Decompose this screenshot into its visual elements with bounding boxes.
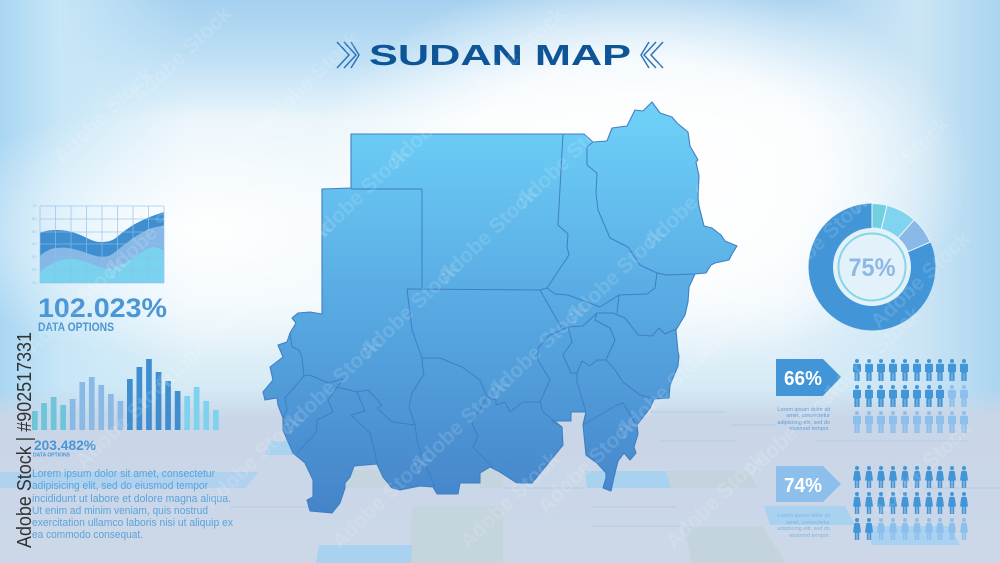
chart axis labels: 30 [32, 254, 37, 259]
watermarks: Adobe Stock [533, 412, 642, 518]
bar chart [32, 359, 219, 430]
area: light layer [40, 247, 164, 283]
callout 74%: adipiscing elit, sed do [777, 526, 830, 532]
callout 66%: 66% [784, 368, 822, 390]
map outline [263, 102, 737, 513]
stat: 203.482%: 203.482% [34, 437, 97, 453]
callout 66%: eiusmod tempor. [789, 426, 830, 432]
watermarks: Adobe Stock [21, 252, 130, 358]
chart axis labels [32, 203, 37, 285]
donut segment 1 [872, 204, 887, 229]
watermarks: Adobe Stock [767, 187, 876, 293]
watermarks: Adobe Stock [639, 147, 748, 253]
paragraph: Ut enim ad minim veniam, quis nostrud [32, 505, 208, 517]
area chart [32, 203, 164, 285]
watermarks: Adobe Stock [405, 372, 514, 478]
chart axis labels: 50 [32, 229, 37, 234]
callout 74%: 74% [784, 475, 822, 497]
callout 74%: amet, consectetur [786, 520, 830, 526]
callout 66%: adipiscing elit, sed do [777, 420, 830, 426]
watermarks: Adobe Stock [511, 107, 620, 213]
paragraph: adipisicing elit, sed do eiusmod tempor [32, 480, 208, 492]
chart axis labels: 60 [32, 216, 37, 221]
watermarks: Adobe Stock [739, 377, 848, 483]
watermarks: Adobe Stock [817, 302, 926, 408]
callout 74% [776, 466, 841, 539]
watermarks: Adobe Stock [433, 182, 542, 288]
title chevrons left [337, 42, 359, 68]
chart axis labels: 10 [32, 280, 37, 285]
watermarks: Adobe Stock [845, 112, 954, 218]
map region borders [283, 134, 695, 487]
watermarks: Adobe Stock [99, 177, 208, 283]
chart axis labels: 70 [32, 203, 37, 208]
watermarks: Adobe Stock [866, 227, 975, 333]
watermarks: Adobe Stock [383, 67, 492, 173]
stat: 102.023%: DATA OPTIONS [38, 320, 114, 334]
donut value: 75% [848, 254, 896, 282]
watermarks: Adobe Stock [71, 367, 180, 473]
paragraph: ea commodo consequat. [32, 529, 143, 541]
watermarks: Adobe Stock [461, 2, 570, 108]
watermarks: Adobe Stock [611, 337, 720, 443]
watermarks: Adobe Stock [49, 62, 158, 168]
paragraph: Lorem ipsum dolor sit amet, consectetur [32, 468, 215, 480]
pictogram: men [853, 359, 968, 433]
watermarks: Adobe Stock [277, 332, 386, 438]
paragraph [32, 468, 233, 541]
paragraph: incididunt ut labore et dolore magna aliqua. [32, 493, 231, 505]
area: dark layer [40, 212, 164, 283]
watermarks: Adobe Stock [199, 407, 308, 513]
stat: 203.482%: DATA OPTIONS [33, 452, 70, 458]
chart axis labels: 20 [32, 267, 37, 272]
chart axis labels: 40 [32, 241, 37, 246]
watermarks: Adobe Stock [717, 72, 826, 178]
callout 66% [776, 359, 841, 432]
watermarks: Adobe Stock [589, 32, 698, 138]
callout 74%: Lorem ipsum dolor sit [777, 513, 830, 519]
title [337, 40, 663, 72]
map: Sudan [263, 102, 737, 513]
watermarks: Adobe Stock [867, 417, 976, 523]
donut center [833, 228, 911, 306]
watermarks: Adobe Stock [561, 222, 670, 328]
watermarks: Adobe Stock [255, 27, 364, 133]
stock id vertical label: Adobe Stock | #902517331 [14, 332, 36, 548]
callout 74%: eiusmod tempor. [789, 533, 830, 539]
watermarks: Adobe Stock [127, 2, 236, 108]
donut segment 3 [898, 220, 930, 252]
callout 66%: amet, consectetur [786, 413, 830, 419]
pictogram: women [853, 466, 968, 540]
watermarks: Adobe Stock [177, 102, 286, 208]
watermarks: Adobe Stock [327, 447, 436, 553]
stat: 102.023% [38, 293, 167, 334]
stat: 102.023%: 102.023% [38, 293, 167, 323]
watermarks: Adobe Stock [305, 142, 414, 248]
donut chart [821, 204, 930, 318]
title text: SUDAN MAP [369, 40, 631, 72]
watermarks: Adobe Stock [227, 217, 336, 323]
watermarks: Adobe Stock [455, 447, 564, 553]
watermarks: Adobe Stock [355, 257, 464, 363]
floor panels [0, 412, 1000, 563]
watermarks: Adobe Stock [689, 262, 798, 368]
watermarks: Adobe Stock [483, 297, 592, 403]
watermarks: Adobe Stock [149, 292, 258, 398]
area: mid layer [40, 226, 164, 283]
paragraph: exercitation ullamco laboris nisi ut aliquip ex [32, 517, 233, 529]
callout 66%: Lorem ipsum dolor sit [777, 407, 830, 413]
watermarks: Adobe Stock [661, 447, 770, 553]
donut segment 2 [881, 205, 914, 238]
title chevrons right [641, 42, 663, 68]
